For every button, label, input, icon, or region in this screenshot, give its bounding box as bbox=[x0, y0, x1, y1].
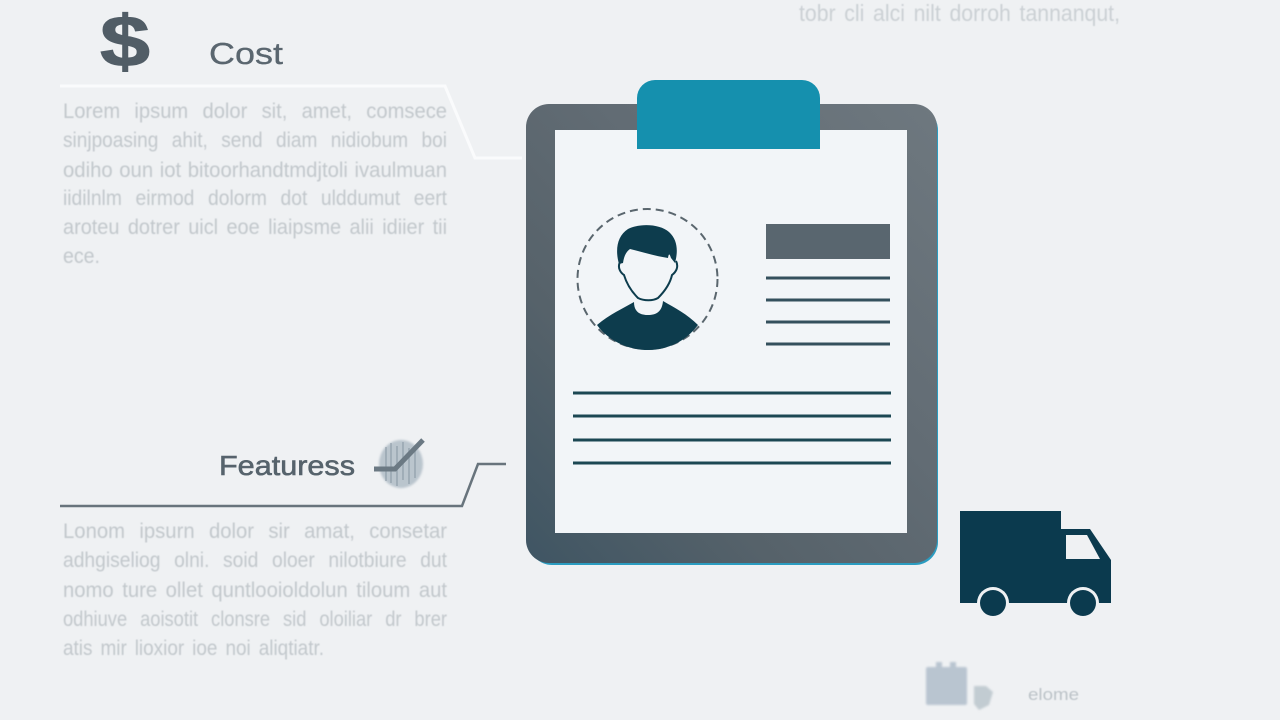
heading: features: Featuress bbox=[219, 450, 355, 481]
text block: features description: Lonom ipsurn dolor sir amat, consetar bbox=[63, 520, 447, 543]
long text lines bbox=[573, 393, 891, 463]
clipboard frame bbox=[526, 104, 937, 563]
panel: features bbox=[60, 440, 506, 660]
text block: features description: atis mir lioxior ioe noi aliqtiatr. bbox=[63, 637, 324, 660]
text block: cost description: Lorem ipsum dolor sit, amet, comsece bbox=[63, 100, 447, 123]
icon: checkmark bbox=[374, 440, 423, 488]
top caption text: tobr cli alci nilt dorroh tannanqut, bbox=[799, 0, 1120, 26]
text block: features description: adhgiseliog olni. soid oloer nilotbiure dut bbox=[63, 549, 447, 572]
text block: features description bbox=[63, 520, 447, 660]
icon: dollar sign: $ bbox=[100, 2, 150, 82]
icon: delivery truck bbox=[960, 511, 1111, 619]
icon: faded package bbox=[926, 662, 993, 710]
text block: cost description: sinjpoasing ahit, send diam nidiobum boi bbox=[63, 129, 447, 152]
text block: cost description: odiho oun iot bitoorhandtmdjtoli ivaulmuan bbox=[63, 159, 447, 182]
panel: cost bbox=[60, 2, 522, 268]
avatar shoulders bbox=[597, 301, 698, 350]
text block: features description: odhiuve aoisotit clonsre sid oloiliar dr brer bbox=[63, 608, 447, 631]
text block: features description: nomo ture ollet quntlooioldolun tiloum aut bbox=[63, 579, 447, 602]
connector line: cost bbox=[60, 86, 522, 158]
faded label: elome bbox=[1028, 685, 1079, 704]
avatar face outline bbox=[619, 261, 677, 300]
short text lines bbox=[766, 278, 890, 344]
clipboard teal edge bbox=[529, 107, 938, 565]
avatar hair bbox=[617, 225, 677, 264]
clipboard bbox=[526, 80, 938, 565]
header block bbox=[766, 224, 890, 259]
clipboard paper bbox=[555, 130, 907, 533]
text block: cost description bbox=[63, 100, 447, 268]
connector line: features bbox=[60, 464, 506, 506]
avatar dashed ring bbox=[578, 209, 718, 349]
heading: cost: Cost bbox=[209, 36, 283, 71]
avatar bbox=[578, 209, 718, 350]
clipboard clip bbox=[637, 80, 820, 149]
text block: cost description: ece. bbox=[63, 245, 100, 268]
text block: cost description: iidilnlm eirmod dolorm dot ulddumut eert bbox=[63, 187, 447, 210]
text block: cost description: aroteu dotrer uicl eoe liaipsme alii idiier tii bbox=[63, 216, 447, 239]
